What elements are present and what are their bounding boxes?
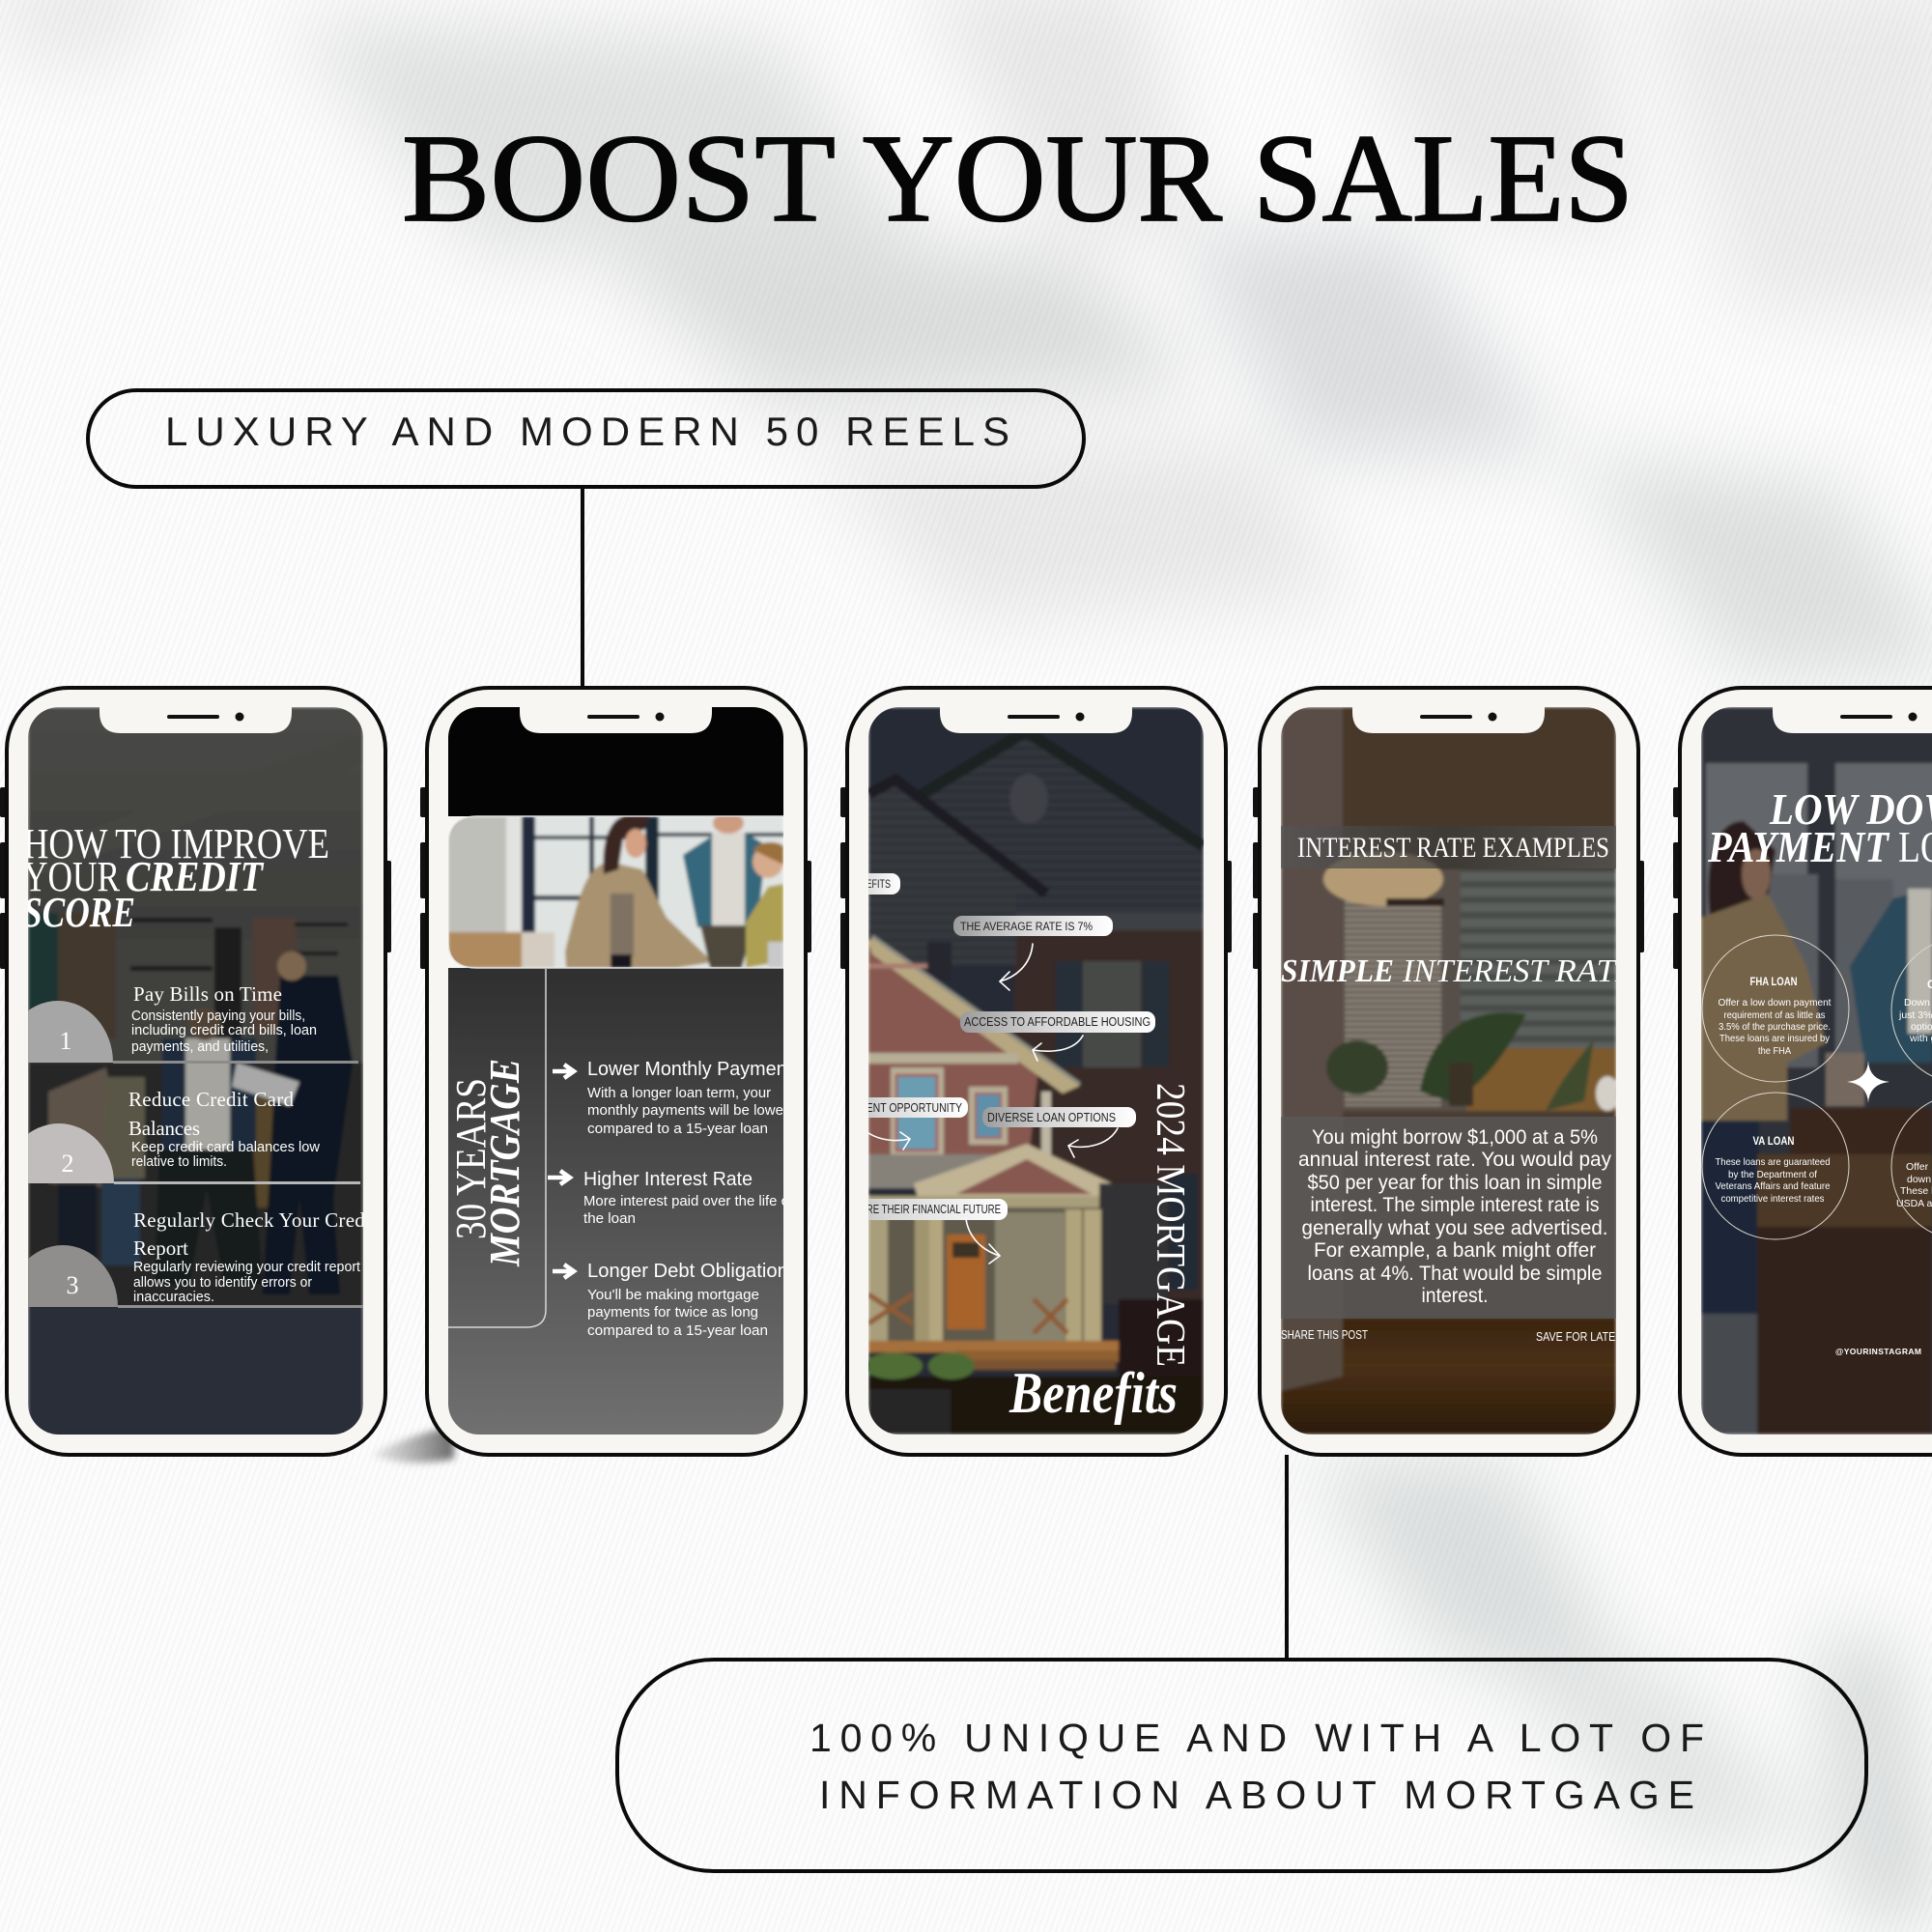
- circle: fha loan: These loans are insured by: [1719, 1033, 1831, 1044]
- headline: how to improve your credit score: CREDIT: [126, 853, 265, 900]
- screen 1 content: [28, 707, 363, 1435]
- benefit: longer debt obligation: You'll be making mortgage: [587, 1288, 759, 1303]
- circle: va loan: VA LOAN: [1752, 1136, 1795, 1148]
- label pill: benefits: [831, 873, 900, 895]
- text panel: example paragraph: interest. The simple interest rate is: [1310, 1194, 1600, 1216]
- list arch 2: [4, 1123, 360, 1184]
- heading and text: pay bills on time: Pay Bills on Time: [133, 982, 282, 1006]
- headline: how to improve your credit score: SCORE: [23, 889, 135, 936]
- benefit: higher interest rate: [583, 1168, 794, 1227]
- band: interest rate examples: [1281, 826, 1616, 868]
- benefit: lower monthly payment: compared to a 15-year loan: [587, 1122, 768, 1137]
- arrow from financial future: [966, 1219, 1000, 1264]
- phone notch: [1773, 705, 1932, 733]
- heading and text: pay bills on time: [131, 982, 317, 1055]
- drop shadow between phones: [372, 1426, 454, 1463]
- benefit: lower monthly payment: With a longer loan term, your: [587, 1086, 771, 1101]
- photo: suburban house: [865, 707, 1204, 1435]
- list arch 3: [8, 1245, 363, 1308]
- headline: how to improve your credit score: [28, 829, 328, 927]
- label pill: investment opportunity: INVESTMENT OPPORTUNITY: [821, 1101, 963, 1115]
- label pill: benefits: BENEFITS: [848, 877, 891, 891]
- rotated title: 30 years mortgage: [456, 1061, 520, 1267]
- phone 4: interest rate examples: [1253, 688, 1644, 1455]
- circle: fha loan: FHA LOAN: [1750, 977, 1797, 988]
- heading and text: regularly check your credit report: [133, 1212, 363, 1301]
- benefit: lower monthly payment: Lower Monthly Payments: [587, 1058, 802, 1080]
- circle: va loan: by the Department of: [1728, 1169, 1817, 1180]
- phone 1: how to improve your credit score: [0, 688, 391, 1455]
- text panel: example paragraph: For example, a bank might offer: [1314, 1239, 1596, 1262]
- phone notch: [520, 705, 712, 733]
- heading: simple interest rate: RATE: [1554, 953, 1636, 989]
- arrow from diverse loan options: [1068, 1128, 1118, 1157]
- icon: arrow 3: [553, 1264, 574, 1278]
- photo outline and side panel outline: [448, 816, 783, 968]
- title: BOOST: [402, 109, 836, 248]
- arrow from investment opportunity: [868, 1132, 910, 1150]
- rotated title: 30 years mortgage: 30 YEARS: [447, 1078, 495, 1239]
- text panel: example paragraph: $50 per year for this loan in simple: [1308, 1172, 1602, 1194]
- screen 5 content: [1701, 707, 1932, 1435]
- heading and text: pay bills on time: payments, and utilities,: [131, 1039, 269, 1055]
- circle: fha loan: requirement of as little as: [1723, 1009, 1826, 1021]
- phone 3: 2024 mortgage benefits: [792, 688, 1232, 1455]
- list arch 2: 2: [62, 1150, 73, 1178]
- band: interest rate examples: INTEREST RATE EXAMPLES: [1297, 832, 1609, 864]
- list arch 1: [3, 1001, 358, 1064]
- screen 3 content: [792, 707, 1204, 1435]
- screen 2 content: [447, 707, 802, 1435]
- circle: fha loan: Offer a low down payment: [1718, 997, 1832, 1009]
- label pill: affordable housing: [960, 1011, 1155, 1033]
- title: [402, 109, 1634, 248]
- connector line: top pill to phone: [581, 487, 584, 687]
- heading and text: regularly check your credit report: Regularly reviewing your credit report: [133, 1260, 360, 1275]
- label pill: affordable housing: ACCESS TO AFFORDABLE HOUSING: [964, 1015, 1151, 1029]
- list arch 1: 1: [60, 1027, 71, 1055]
- circle: va loan: competitive interest rates: [1721, 1193, 1824, 1205]
- label pill: investment opportunity: [811, 1097, 968, 1118]
- heading and text: regularly check your credit report: Report: [133, 1236, 188, 1260]
- photo: family with agent in a home: [28, 707, 363, 1442]
- heading: benefits: Benefits: [1009, 1361, 1178, 1425]
- icon: arrow 1: [553, 1065, 574, 1078]
- icon: sparkle: [1847, 1061, 1889, 1103]
- rotated heading: 2024 mortgage: 2024 MORTGAGE: [1148, 1083, 1192, 1367]
- headline: how to improve your credit score: HOW TO IMPROVE: [23, 820, 329, 867]
- circle: va loan: Veterans Affairs and feature: [1716, 1180, 1831, 1192]
- phone notch: [1352, 705, 1545, 733]
- connector line: phone to bottom pill: [1285, 1455, 1289, 1660]
- benefit: longer debt obligation: payments for twice as long: [587, 1305, 758, 1321]
- circle: conventional loan: [1891, 937, 1932, 1084]
- label pill: diverse loan options: [982, 1107, 1136, 1127]
- share label: SHARE THIS POST: [1281, 1327, 1368, 1342]
- callout pill: unique information: [617, 1660, 1866, 1871]
- heading: simple interest rate: [1281, 953, 1636, 989]
- photo: living room with plants: [1281, 707, 1619, 1435]
- handle: @YOURINSTAGRAM: [1835, 1347, 1921, 1356]
- callout pill: unique information: 100% UNIQUE AND WITH A LOT OF: [810, 1716, 1704, 1760]
- benefit: higher interest rate: More interest paid over the life of: [583, 1194, 794, 1209]
- benefit: higher interest rate: Higher Interest Rate: [583, 1168, 753, 1190]
- title: SALES: [1253, 109, 1634, 248]
- text panel: example paragraph: You might borrow $1,000 at a 5%: [1312, 1126, 1598, 1149]
- arrow from affordable housing: [1033, 1036, 1083, 1061]
- phone notch: [940, 705, 1132, 733]
- label pill: financial future: [792, 1199, 1008, 1220]
- label pill: average rate: [953, 916, 1113, 936]
- phone 5: low down payment loans: [1673, 688, 1932, 1455]
- benefit: longer debt obligation: Longer Debt Obligations: [587, 1260, 798, 1282]
- circle: fha loan: the FHA: [1758, 1045, 1791, 1057]
- text panel: example paragraph: loans at 4%. That would be simple: [1308, 1263, 1602, 1285]
- benefit: lower monthly payment: monthly payments will be lower: [587, 1103, 788, 1119]
- headline: low down payment loans: PAYMENT: [1707, 822, 1890, 871]
- arrow from average rate: [1000, 944, 1033, 990]
- callout pill: 50 reels: [88, 390, 1084, 487]
- heading and text: reduce credit card balances: Keep credit card balances low: [131, 1140, 321, 1155]
- phone 2: 30 years mortgage: [420, 688, 811, 1455]
- list arch 3: 3: [66, 1271, 79, 1299]
- circle: fha loan: 3.5% of the purchase price.: [1719, 1021, 1831, 1033]
- circle: fha loan: [1702, 935, 1849, 1082]
- benefit: higher interest rate: the loan: [583, 1211, 636, 1227]
- benefit: lower monthly payment: [587, 1061, 783, 1136]
- benefit: longer debt obligation: compared to a 15-year loan: [587, 1323, 768, 1339]
- heading and text: reduce credit card balances: relative to limits.: [131, 1154, 227, 1170]
- heading and text: regularly check your credit report: inaccuracies.: [133, 1290, 214, 1305]
- text panel: example paragraph: [1281, 1117, 1616, 1319]
- text panel: example paragraph: annual interest rate. You would pay: [1298, 1149, 1611, 1171]
- text panel: example paragraph: interest.: [1422, 1285, 1488, 1307]
- heading: simple interest rate: SIMPLE: [1281, 953, 1394, 989]
- callout pill: unique information: INFORMATION ABOUT MORTGAGE: [819, 1773, 1694, 1817]
- heading and text: regularly check your credit report: allows you to identify errors or: [133, 1275, 312, 1291]
- headline: low down payment loans: [1707, 784, 1932, 871]
- heading and text: reduce credit card balances: Reduce Credit Card: [128, 1088, 294, 1111]
- save label: SAVE FOR LATER: [1536, 1329, 1623, 1344]
- phone notch: [99, 705, 292, 733]
- circle: va loan: [1702, 1093, 1849, 1239]
- headline: how to improve your credit score: YOUR: [23, 853, 121, 900]
- title: YOUR: [863, 109, 1222, 248]
- screen 4 content: [1281, 707, 1636, 1435]
- heading and text: regularly check your credit report: Regularly Check Your Credit: [133, 1208, 377, 1232]
- benefit: longer debt obligation: [587, 1260, 798, 1339]
- heading and text: pay bills on time: including credit card bills, loan: [131, 1023, 317, 1038]
- callout pill: 50 reels: LUXURY AND MODERN 50 REELS: [165, 409, 1009, 454]
- heading and text: pay bills on time: Consistently paying your bills,: [131, 1009, 305, 1024]
- heading: simple interest rate: INTEREST: [1402, 953, 1549, 989]
- circle: usda loan: [1891, 1094, 1932, 1240]
- label pill: diverse loan options: DIVERSE LOAN OPTIONS: [987, 1111, 1116, 1124]
- circle: va loan: These loans are guaranteed: [1716, 1156, 1831, 1168]
- text panel: example paragraph: generally what you see advertised.: [1302, 1217, 1607, 1239]
- label pill: average rate: THE AVERAGE RATE IS 7%: [960, 920, 1093, 933]
- icon: arrow 2: [548, 1171, 570, 1184]
- photo: couple with moving box: [1701, 707, 1932, 1435]
- heading and text: reduce credit card balances: [128, 1088, 321, 1170]
- rotated title: 30 years mortgage: MORTGAGE: [481, 1059, 528, 1267]
- heading and text: reduce credit card balances: Balances: [128, 1117, 200, 1140]
- photo: family moving in: [448, 812, 784, 968]
- label pill: financial future: SECURE THEIR FINANCIAL FUTURE: [840, 1203, 1001, 1216]
